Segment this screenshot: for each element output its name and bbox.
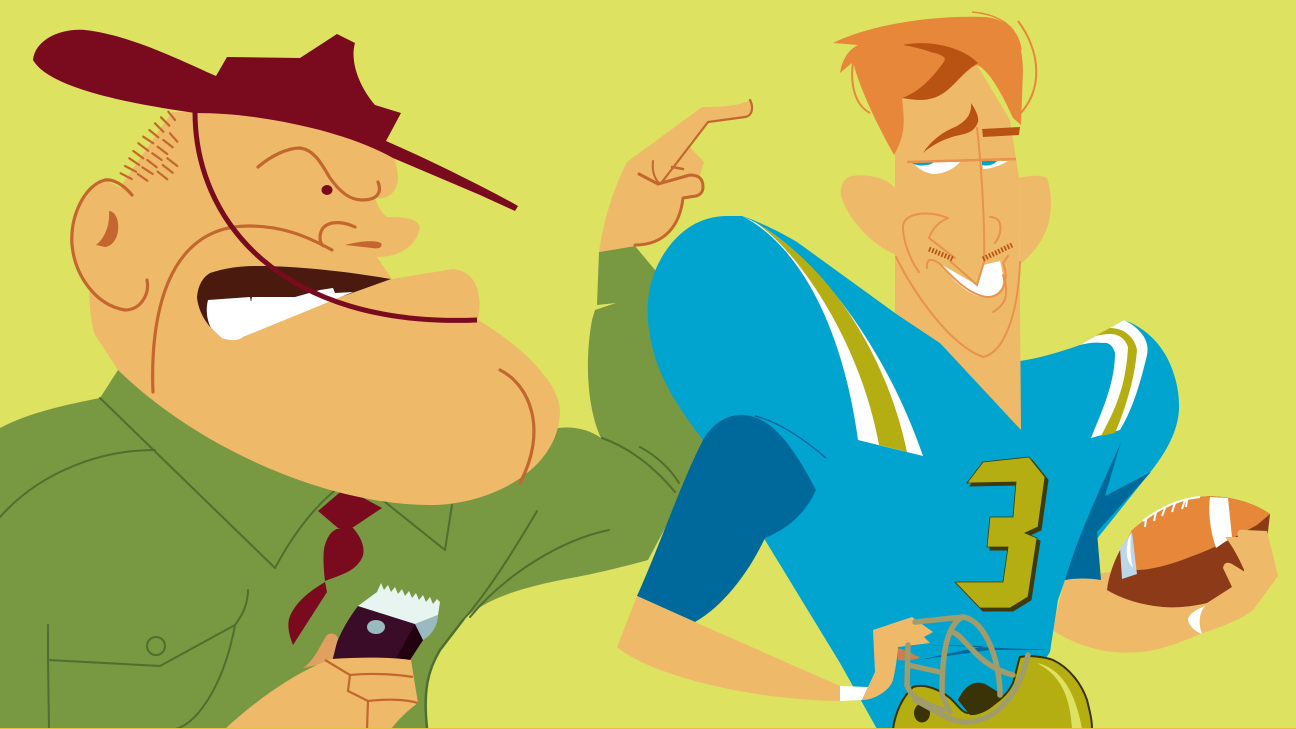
pointing hand [599,100,753,252]
head [72,110,560,505]
ears [841,175,897,255]
hair [833,12,1036,155]
helmet face mask [907,617,1028,722]
left sleeve [637,415,816,622]
football [1107,496,1270,607]
stubble [121,112,177,181]
jersey number 3 [955,457,1048,611]
face and neck [833,12,1051,430]
jersey [637,216,1179,729]
waist creases [918,645,1052,660]
moustache stubble [929,245,1012,259]
bottom edge line [0,728,1296,729]
shirt [0,246,710,729]
grin [942,261,1003,296]
laces [1143,497,1200,527]
right shoulder stripes [1080,320,1148,438]
face lines [896,128,1020,357]
right underarm shadow [1065,442,1151,580]
left shoulder stripes [742,216,923,456]
figure: football player [617,12,1278,729]
hair clipper [332,583,440,660]
right arm [1052,529,1278,653]
hat and chin strap [33,30,518,320]
necktie [288,488,382,645]
ball hand fingers [1188,530,1278,634]
left arm and wristband [617,596,868,701]
helmet [893,656,1092,729]
face lines [153,148,534,483]
player hand [862,617,933,700]
eyes [907,159,1016,174]
mouth [197,266,391,340]
eyebrows [923,103,978,153]
clipper hand [225,634,418,729]
ear [72,180,148,310]
figure: sergeant [0,30,753,729]
